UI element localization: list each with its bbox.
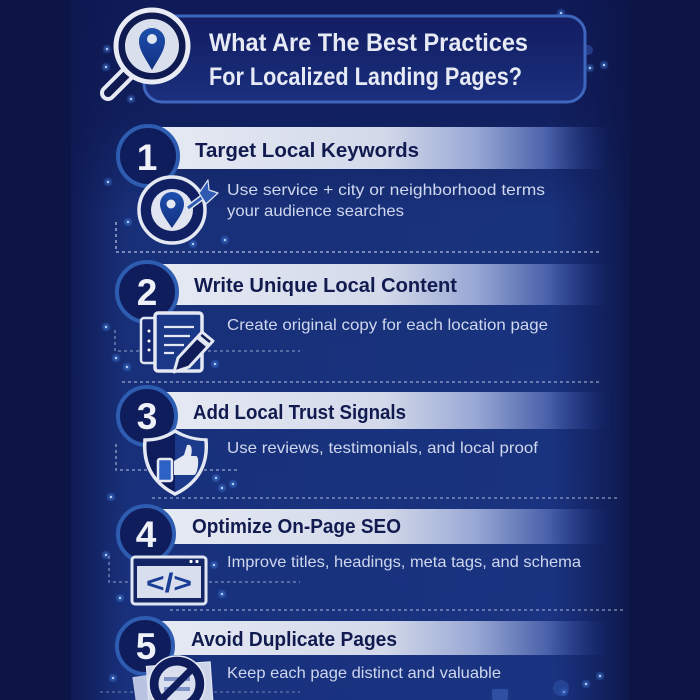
title text: What Are The Best Practices xyxy=(209,29,528,57)
title text xyxy=(209,29,528,91)
icon: target with pin and arrow xyxy=(139,177,218,243)
step 1 description: your audience searches xyxy=(227,203,404,220)
step 4 number badge: 4 xyxy=(136,514,157,555)
step 2 number badge xyxy=(117,262,177,322)
step 4 heading: Optimize On-Page SEO xyxy=(192,516,401,538)
step 2 xyxy=(117,262,610,372)
step 1 xyxy=(118,126,610,243)
step 3 header bar xyxy=(160,392,610,429)
step 3 xyxy=(118,387,610,494)
step 5 description: Keep each page distinct and valuable xyxy=(227,665,501,682)
icon: document and pencil xyxy=(141,313,213,372)
step 2 number badge: 2 xyxy=(137,272,157,313)
icon: code window: </> xyxy=(146,568,192,598)
step 4 header bar xyxy=(160,509,610,544)
step 5 header bar xyxy=(160,621,610,655)
step 5 number badge xyxy=(117,618,173,674)
icon: magnifier with pin xyxy=(108,10,188,93)
title text: For Localized Landing Pages? xyxy=(209,63,522,91)
step 1 number badge: 1 xyxy=(137,137,157,178)
step 4 description: Improve titles, headings, meta tags, and schema xyxy=(227,554,581,571)
icon: code window xyxy=(132,557,206,604)
step 2 header bar xyxy=(160,264,610,305)
step 1 description xyxy=(227,182,545,220)
step 2 description: Create original copy for each location page xyxy=(227,317,548,334)
step 5 heading: Avoid Duplicate Pages xyxy=(191,629,397,651)
step 1 heading: Target Local Keywords xyxy=(195,140,419,162)
step 1 description: Use service + city or neighborhood terms xyxy=(227,182,545,199)
step 3 number badge xyxy=(118,387,176,445)
step 1 header bar xyxy=(160,127,610,169)
step 4 xyxy=(118,506,610,604)
step 3 number badge: 3 xyxy=(137,396,157,437)
sparkles xyxy=(102,10,608,700)
divider lines xyxy=(100,222,625,692)
step 3 heading: Add Local Trust Signals xyxy=(193,402,406,424)
icon: no duplicates xyxy=(132,656,214,700)
icon: shield with thumbs up xyxy=(145,431,206,494)
step 5 number badge: 5 xyxy=(136,626,156,667)
step 2 heading: Write Unique Local Content xyxy=(194,275,457,297)
title box xyxy=(144,16,585,102)
step 5 xyxy=(117,618,610,700)
step 3 description: Use reviews, testimonials, and local proof xyxy=(227,440,539,457)
step 4 number badge xyxy=(118,506,174,562)
step 1 number badge xyxy=(118,126,178,186)
